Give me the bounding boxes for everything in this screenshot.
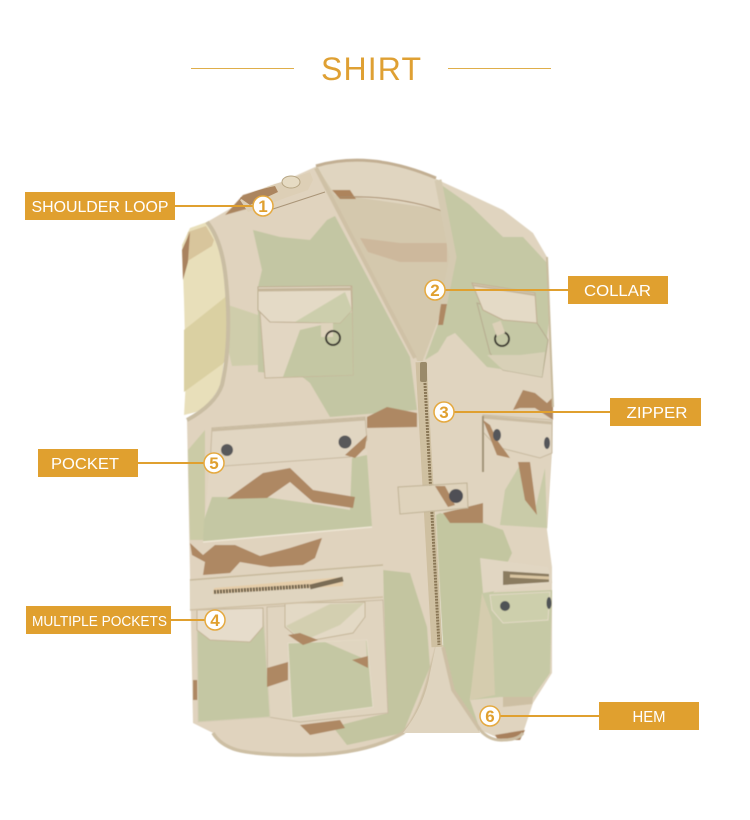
left panel camo green bbox=[253, 216, 417, 417]
callout 6: hem: HEM bbox=[632, 709, 666, 726]
pocket: middle right bbox=[483, 415, 552, 528]
shoulder loop bbox=[240, 172, 325, 212]
vest illustration bbox=[182, 159, 553, 755]
right panel camo green bbox=[425, 184, 550, 375]
callout 5: pocket: 5 bbox=[209, 454, 219, 473]
right front panel bbox=[423, 180, 553, 740]
callout 2: collar: 2 bbox=[430, 281, 440, 300]
pocket: upper left bbox=[258, 286, 353, 378]
callout 3: zipper: 3 bbox=[439, 403, 449, 422]
pocket: large left bbox=[203, 417, 372, 542]
callout 6: hem: 6 bbox=[485, 707, 495, 726]
callout 2: collar: COLLAR bbox=[584, 283, 651, 300]
callout 4: multiple pockets bbox=[26, 606, 225, 634]
pockets: lower left bbox=[190, 565, 388, 722]
right panel camo brown bbox=[438, 304, 447, 325]
vest interior: collar and back bbox=[182, 159, 455, 415]
left panel camo brown bbox=[367, 407, 417, 428]
zipper tab bbox=[398, 483, 468, 514]
title: SHIRT bbox=[321, 51, 421, 87]
center hem panel bbox=[403, 645, 480, 733]
zipper bbox=[420, 362, 439, 647]
pocket: lower right bbox=[470, 558, 552, 707]
callout 5: pocket: POCKET bbox=[51, 456, 119, 473]
left armhole inner bbox=[182, 222, 228, 415]
left front panel bbox=[187, 167, 437, 755]
callout 1: shoulder loop: 1 bbox=[258, 197, 268, 216]
callout 3: zipper: ZIPPER bbox=[626, 405, 688, 422]
callout 1: shoulder loop bbox=[25, 192, 273, 220]
callout 2: collar bbox=[425, 276, 668, 304]
callout 5: pocket bbox=[38, 449, 224, 477]
callout 4: multiple pockets: 4 bbox=[210, 611, 220, 630]
pocket: upper right bbox=[472, 283, 548, 377]
callout 3: zipper bbox=[434, 398, 701, 426]
callout 6: hem bbox=[480, 702, 699, 730]
callout 1: shoulder loop: SHOULDER LOOP bbox=[32, 199, 168, 216]
callout 4: multiple pockets: MULTIPLE POCKETS bbox=[32, 613, 167, 630]
